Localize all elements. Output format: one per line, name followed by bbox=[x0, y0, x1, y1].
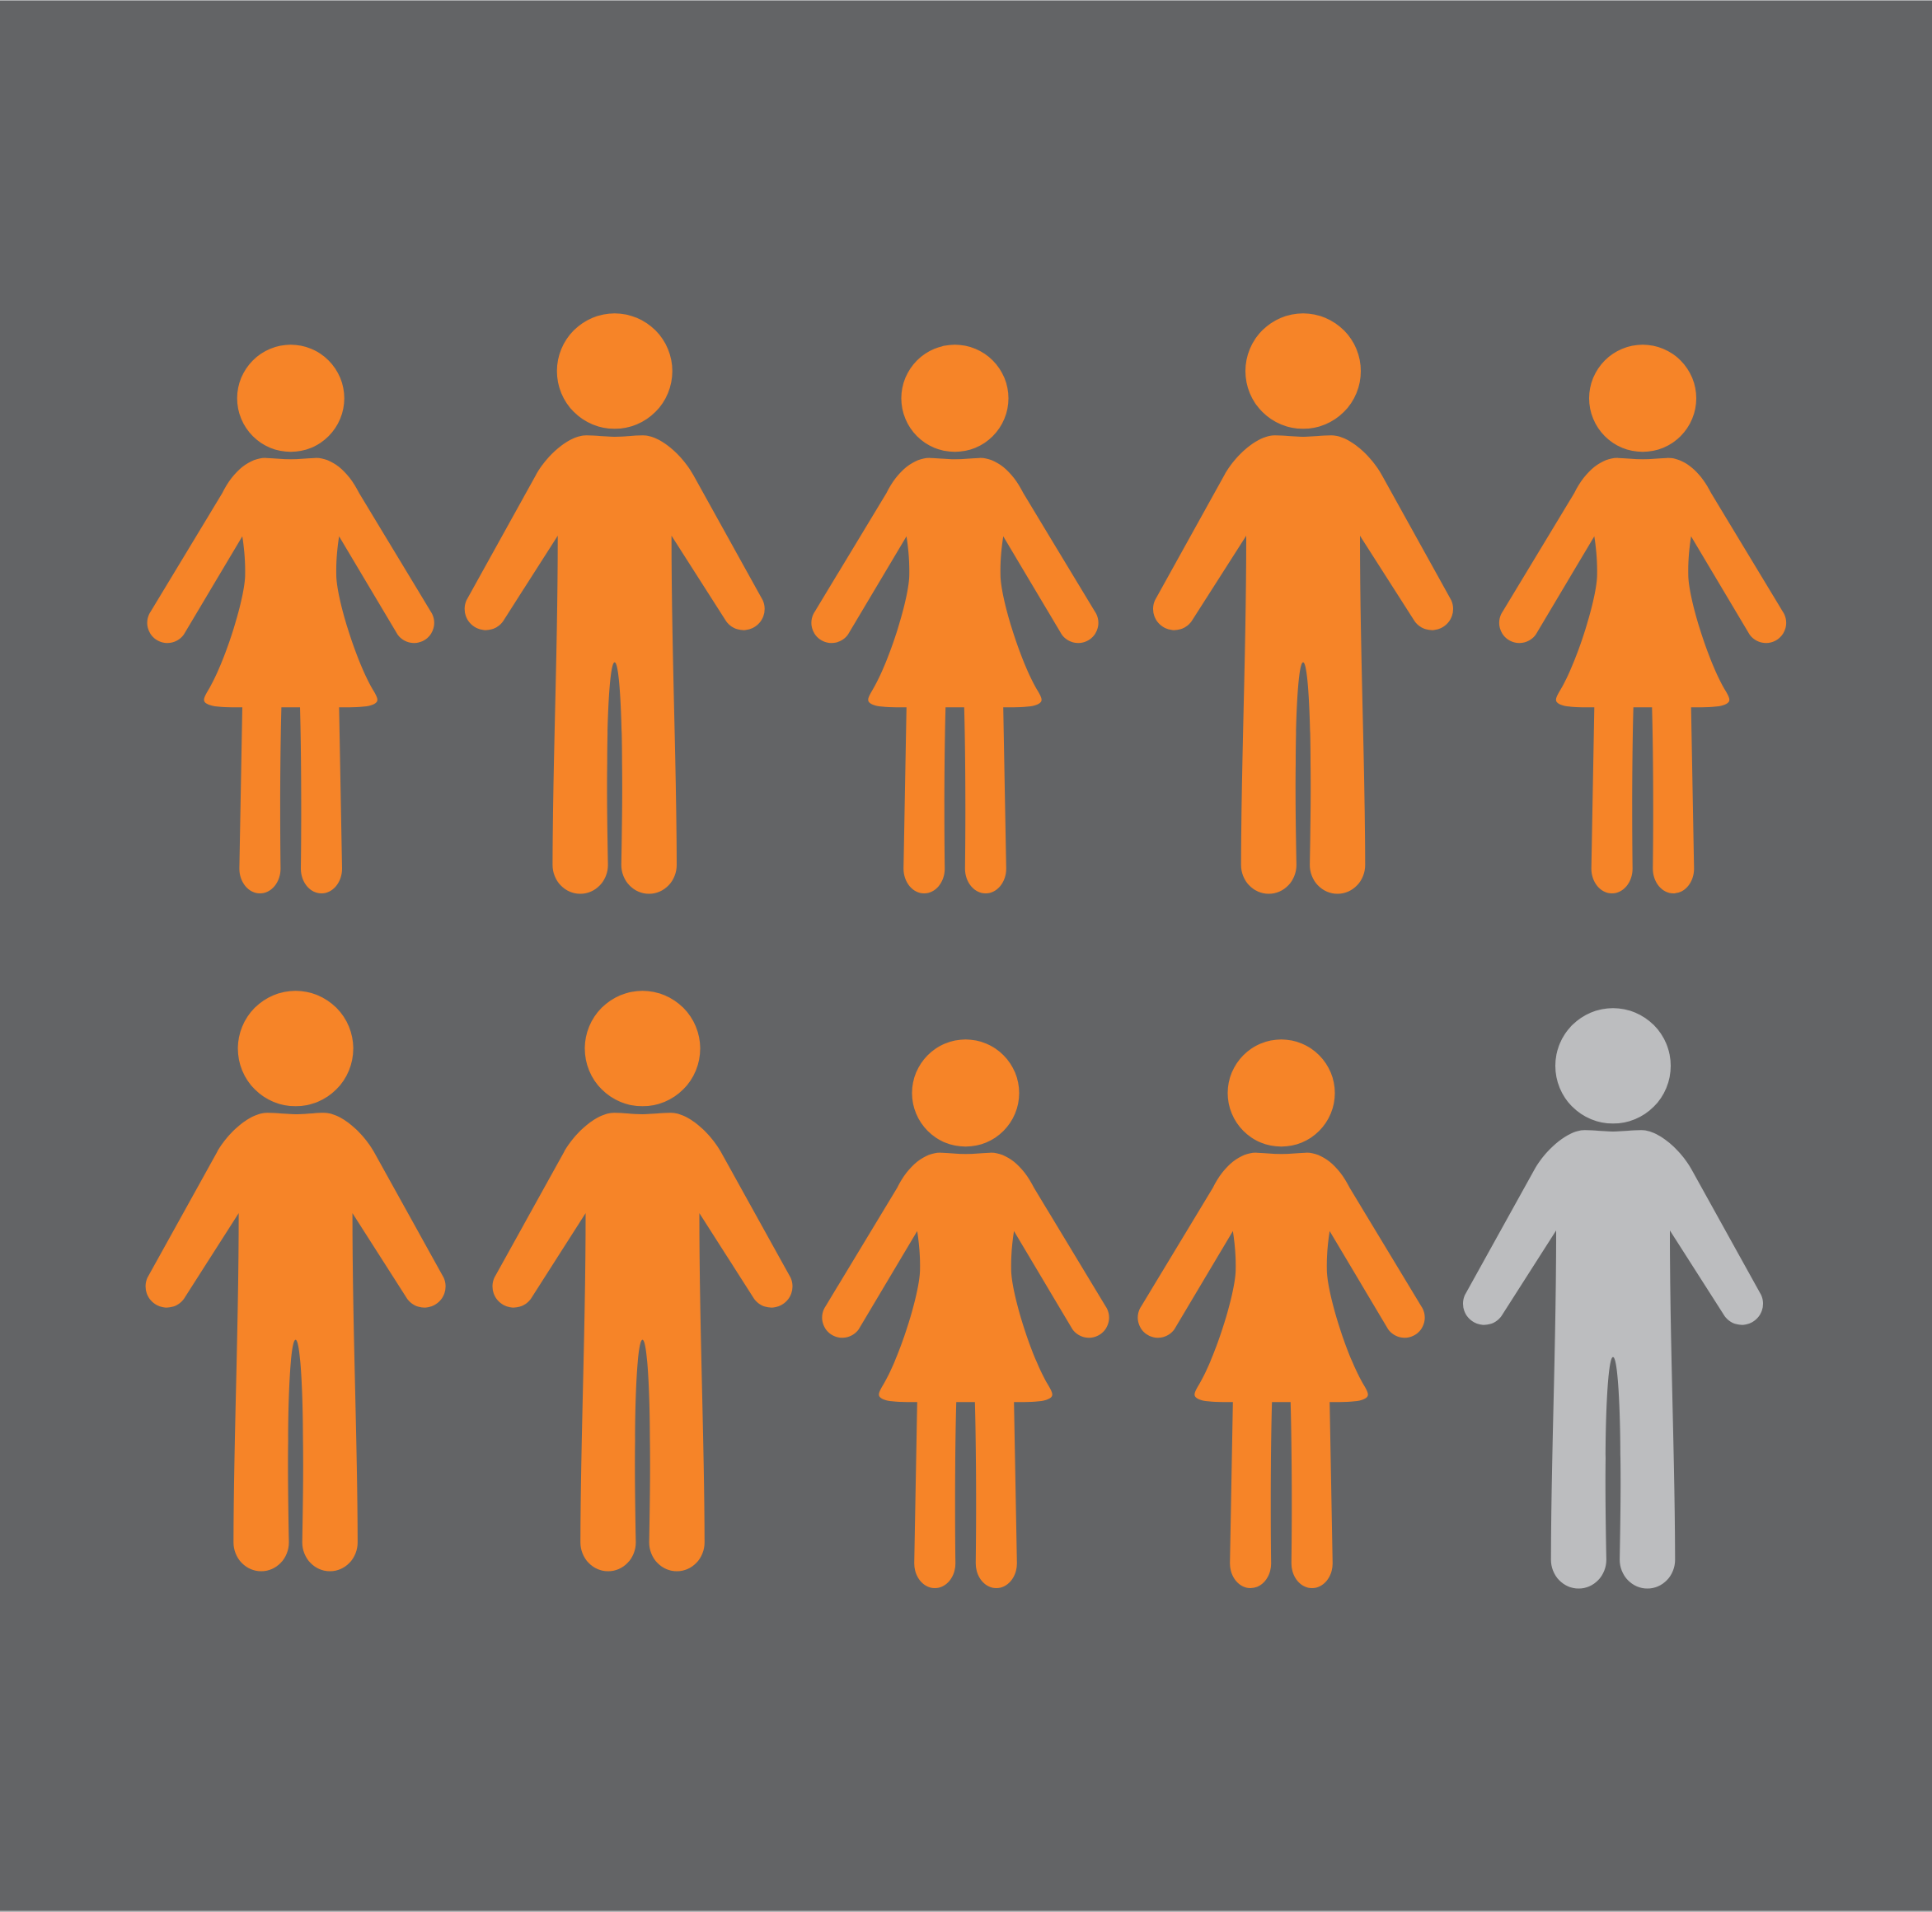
body bbox=[1137, 1153, 1425, 1588]
person 1: orange woman, top row bbox=[148, 344, 434, 893]
person 7: orange man, bottom row bbox=[493, 991, 792, 1571]
head bbox=[902, 344, 1009, 452]
person 4: orange man, top row bbox=[1153, 313, 1453, 893]
person 6: orange man, bottom row bbox=[146, 991, 446, 1571]
person 2: orange man, top row bbox=[465, 313, 765, 893]
head bbox=[237, 344, 345, 452]
body bbox=[148, 458, 434, 893]
head bbox=[585, 991, 701, 1106]
person 8: orange woman, bottom row bbox=[822, 1039, 1109, 1588]
head bbox=[1589, 344, 1696, 452]
head bbox=[1555, 1008, 1671, 1123]
head bbox=[1245, 313, 1361, 429]
body bbox=[1153, 435, 1453, 893]
head bbox=[238, 991, 354, 1106]
head bbox=[1228, 1039, 1335, 1146]
person 5: orange woman, top row bbox=[1499, 344, 1786, 893]
person 9: orange woman, bottom row bbox=[1137, 1039, 1425, 1588]
body bbox=[1463, 1130, 1763, 1589]
body bbox=[1499, 458, 1786, 893]
body bbox=[146, 1113, 446, 1571]
head bbox=[557, 313, 673, 429]
person 3: orange woman, top row bbox=[811, 344, 1099, 893]
head bbox=[912, 1039, 1019, 1146]
body bbox=[465, 435, 765, 893]
body bbox=[811, 458, 1099, 893]
person 10: light grey man, bottom row bbox=[1463, 1008, 1763, 1589]
body bbox=[493, 1113, 792, 1571]
body bbox=[822, 1153, 1109, 1588]
